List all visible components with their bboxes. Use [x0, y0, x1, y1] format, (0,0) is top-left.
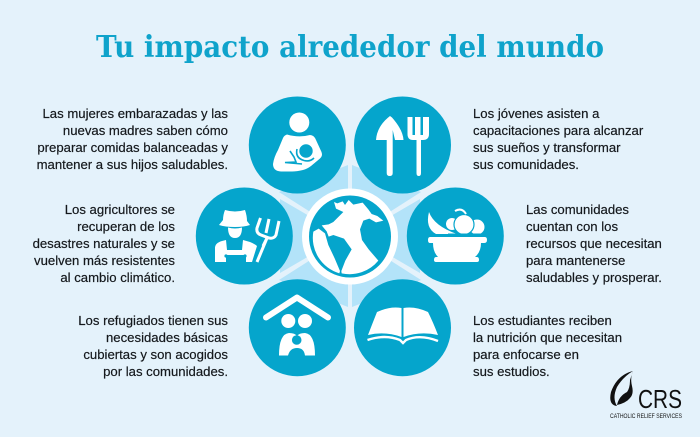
- wedge backdrop connecting circles to globe: [279, 165, 421, 307]
- text block: students: Los estudiantes reciben: [473, 313, 612, 328]
- text block: youth: sus comunidades.: [473, 157, 579, 172]
- icon: farmer with pitchfork: [196, 188, 293, 284]
- text block: refugees: cubiertas y son acogidos: [83, 347, 228, 362]
- text block: mothers: Las mujeres embarazadas y las: [42, 106, 228, 121]
- icon: fruit basket: [407, 188, 504, 284]
- text block: refugees: necesidades básicas: [106, 330, 228, 345]
- text block: mothers: preparar comidas balanceadas y: [37, 140, 228, 155]
- icon: house with family: [249, 279, 346, 376]
- text block: mothers: mantener a sus hijos saludables.: [37, 157, 228, 172]
- text block: youth: sus sueños y transformar: [473, 140, 621, 155]
- text block: youth: [473, 106, 644, 172]
- text block: farmers: recuperan de los: [77, 219, 175, 234]
- text block: youth: capacitaciones para alcanzar: [473, 123, 644, 138]
- logo: Catholic Relief Services: CATHOLIC RELIEF SERVICES: [610, 414, 682, 420]
- text block: youth: Los jóvenes asisten a: [473, 106, 600, 121]
- logo: Catholic Relief Services: CRS: [638, 384, 682, 414]
- text block: communities: cuentan con los: [526, 219, 618, 234]
- icon: open book: [354, 279, 451, 376]
- text block: farmers: vuelven más resistentes: [34, 253, 175, 268]
- text block: farmers: al cambio climático.: [60, 270, 175, 285]
- text block: refugees: Los refugiados tienen sus: [78, 313, 228, 328]
- icon: globe: [302, 188, 398, 284]
- icon: mother and baby: [249, 96, 346, 194]
- text block: refugees: [78, 313, 228, 379]
- title: Tu impacto alrededor del mundo: [96, 30, 604, 65]
- logo: Catholic Relief Services: [610, 371, 682, 420]
- text block: communities: saludables y prosperar.: [526, 270, 662, 285]
- text block: refugees: por las comunidades.: [103, 364, 228, 379]
- text block: students: para enfocarse en: [473, 347, 579, 362]
- text block: communities: para mantenerse: [526, 253, 625, 268]
- text block: students: la nutrición que necesitan: [473, 330, 622, 345]
- text block: farmers: Los agricultores se: [65, 202, 175, 217]
- text block: students: sus estudios.: [473, 364, 550, 379]
- text block: farmers: desastres naturales y se: [33, 236, 175, 251]
- text block: communities: recursos que necesitan: [526, 236, 662, 251]
- icon: shovel and fork: [354, 96, 451, 194]
- text block: farmers: [33, 202, 175, 285]
- text block: mothers: [37, 106, 228, 172]
- text block: mothers: nuevas madres saben cómo: [63, 123, 228, 138]
- text block: students: [473, 313, 622, 379]
- text block: communities: [526, 202, 662, 285]
- text block: communities: Las comunidades: [526, 202, 629, 217]
